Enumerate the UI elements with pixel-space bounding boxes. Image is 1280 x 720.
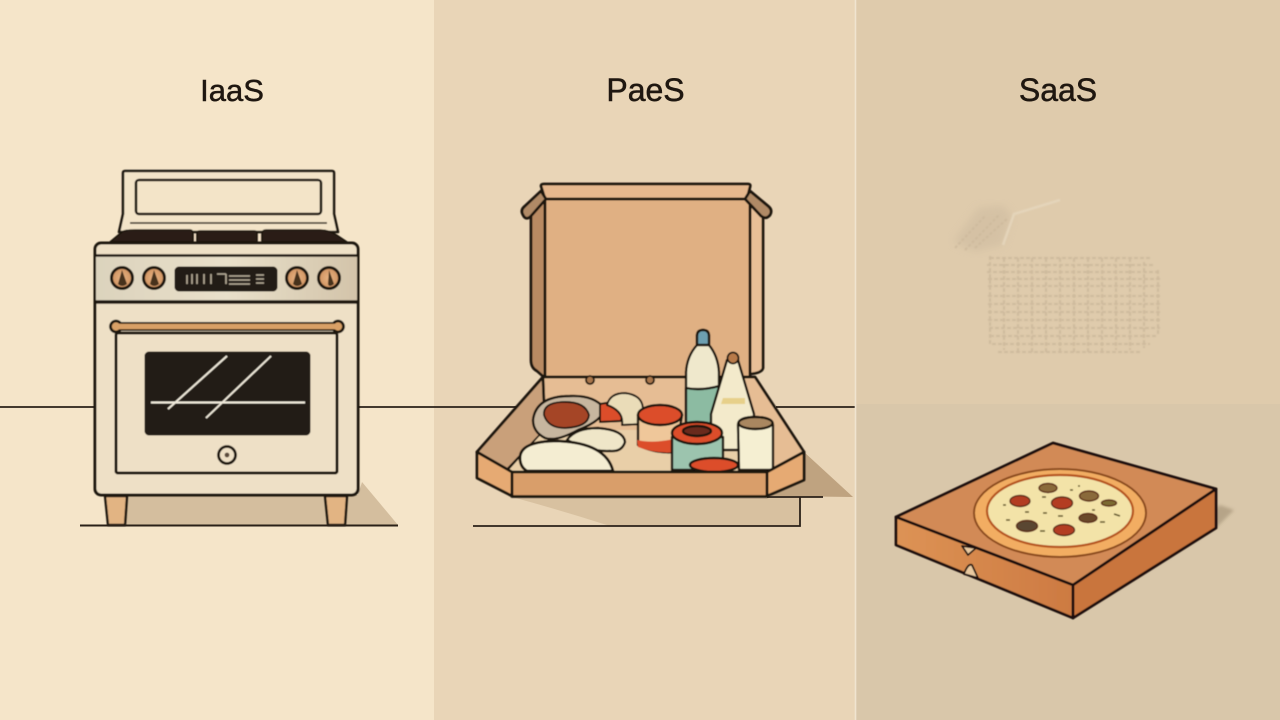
icon: closed pizza box [896, 443, 1216, 618]
lid [545, 199, 750, 377]
control panel [96, 255, 357, 302]
burners [110, 230, 193, 242]
tray floor [507, 430, 775, 472]
handle [110, 321, 344, 332]
white cup [738, 417, 773, 470]
tall bottle [686, 330, 719, 426]
slots [586, 376, 654, 384]
herbs [1003, 486, 1120, 531]
oval loaf small [567, 428, 625, 451]
box right side [1073, 489, 1216, 618]
stove shadow [126, 482, 398, 525]
oven window [145, 352, 310, 435]
red pepper [690, 458, 738, 472]
legs [105, 496, 127, 525]
stove body [95, 243, 358, 495]
tray back [477, 377, 804, 472]
heading: SaaS: SaaS [1019, 72, 1097, 108]
bowl of sauce [533, 396, 604, 439]
box notches [962, 546, 976, 555]
lid top flap [541, 184, 750, 199]
lid corner flaps [522, 191, 546, 218]
oval loaf large [520, 441, 613, 471]
floor line [0, 406, 434, 408]
icon: stove [95, 171, 358, 525]
icon: open box with ingredients [477, 184, 804, 496]
panel: SaaS [855, 0, 1280, 720]
box top [896, 443, 1216, 585]
heading: IaaS: IaaS [200, 73, 264, 108]
pizza box shadow [1073, 505, 1234, 618]
display [175, 267, 277, 291]
toppings [1010, 484, 1116, 536]
box left side [896, 517, 1073, 618]
stove floor line [80, 524, 398, 526]
panel: PaaS [434, 0, 855, 720]
red wrapped item [600, 402, 623, 422]
faded ghost box [953, 200, 1162, 354]
jar with red band [637, 405, 682, 452]
ghost flap [953, 205, 1012, 252]
round cheese [607, 393, 643, 425]
panel: IaaS [0, 0, 434, 720]
tray walls [477, 452, 512, 496]
floor lines [473, 497, 823, 526]
door knob [218, 446, 236, 464]
pizza [974, 469, 1146, 557]
ghost grid [987, 256, 1162, 354]
lid side panels [531, 199, 545, 378]
teal jar [672, 422, 723, 470]
knobs [112, 268, 340, 288]
short bottle [711, 352, 754, 450]
box shadow [512, 497, 800, 526]
heading: PaeS: PaeS [606, 72, 685, 108]
door [116, 333, 337, 473]
floor line [434, 406, 855, 408]
backsplash [119, 171, 338, 232]
